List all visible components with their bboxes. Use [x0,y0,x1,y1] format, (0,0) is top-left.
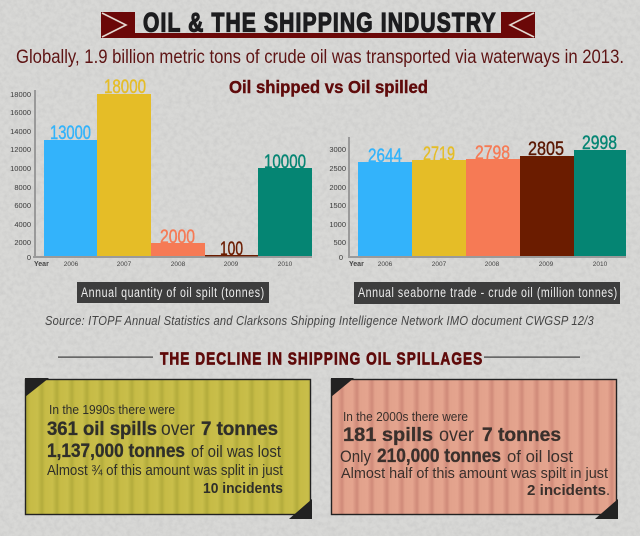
icon: bottom-right corner [595,499,618,519]
x axis labels [34,261,293,268]
bar 2009 [205,239,258,260]
bar 2006: 2644 [368,146,402,167]
text: 1990s facts: In the 1990s there were [49,402,175,417]
y axis: 2000 [329,183,346,192]
text: 2000s facts [340,409,610,499]
y axis: 10000 [10,164,31,173]
y axis: 0 [339,253,343,262]
x axis labels: 2008 [485,261,500,268]
y axis: 2500 [329,164,346,173]
chart caption: seaborne trade [354,282,620,304]
y axis: 2000 [14,238,31,247]
y axis: 4000 [14,220,31,229]
bar 2007: 18000 [104,77,146,98]
bar chart: annual quantity of oil spilt [10,77,312,268]
text: 1990s facts: 10 incidents [203,481,283,497]
bar 2008 [151,227,205,256]
bar 2008 [466,143,520,256]
bar 2010 [258,152,312,256]
y axis: 12000 [10,145,31,154]
y axis: 1000 [329,220,346,229]
y axis: 18000 [10,90,31,99]
text: 2000s facts: In the 2000s there were [343,409,468,424]
text: 2000s facts: 2 incidents [527,483,606,499]
bar 2009: 100 [220,239,243,260]
bar chart: seaborne crude oil trade [329,133,626,268]
y axis: 6000 [14,201,31,210]
x axis labels: 2007 [117,261,132,268]
bar 2008: 2798 [475,143,510,164]
bar 2007 [412,144,466,256]
chart caption: oil spilt: Annual quantity of oil spilt (tonnes) [81,285,264,300]
x axis labels [349,261,608,268]
text: 2000s facts: 181 spills [343,425,433,446]
y axis: 1500 [329,201,346,210]
bar 2010: 2998 [582,133,617,154]
x axis labels: 2007 [432,261,447,268]
text: 1990s facts [47,402,283,497]
text: 2000s facts: over [439,425,475,446]
chart caption: seaborne trade: Annual seaborne trade - crude oil (million tonnes) [358,285,617,300]
text: 2000s facts: 7 tonnes [482,425,561,446]
icon: left ribbon end [101,12,135,38]
y axis: 0 [27,253,31,262]
bar 2006 [44,123,97,256]
bar 2009 [520,139,574,256]
y axis: 500 [333,238,346,247]
x axis labels: 2008 [171,261,186,268]
icon: right ribbon end [501,12,535,38]
text: 2000s facts: Almost half of this amount was spilt in just [341,466,608,482]
source note: Source: ITOPF Annual Statistics and Clarksons Shipping Intelligence Network IMO document CWGSP 12/3 [45,313,594,328]
title: OIL & THE SHIPPING INDUSTRY [143,8,496,38]
x axis labels: Year [34,261,49,268]
title banner [101,8,535,38]
y axis: 8000 [14,183,31,192]
x axis labels: 2010 [278,261,293,268]
bar 2007 [97,77,151,256]
bar 2009: 2805 [528,139,564,160]
x axis labels: 2006 [378,261,393,268]
y axis [10,90,312,262]
text: 2000s facts: . [606,483,610,499]
icon: bottom-right corner [289,499,312,519]
chart heading: Oil shipped vs Oil spilled [229,77,428,97]
bar 2010: 10000 [264,152,306,173]
text: 1990s facts: 7 tonnes [201,419,278,440]
panel: 1990s [25,378,312,519]
y axis: 14000 [10,127,31,136]
text: 1990s facts: 1,137,000 tonnes [47,441,185,462]
text: 1990s facts: over [161,419,196,440]
panel: 2000s [331,378,618,519]
icon: top-left corner [25,378,49,397]
bar 2008: 2000 [160,227,195,248]
y axis: 3000 [329,145,346,154]
y axis [329,137,626,262]
icon: top-left corner [331,378,354,397]
section heading: THE DECLINE IN SHIPPING OIL SPILLAGES [160,350,483,369]
bar 2007: 2719 [423,144,455,165]
x axis labels: 2009 [539,261,554,268]
text: 2000s facts: 210,000 tonnes [377,446,501,467]
x axis labels: 2010 [593,261,608,268]
text: 1990s facts: of oil was lost [191,442,281,461]
x axis labels: 2006 [64,261,79,268]
text: 1990s facts: Almost ¾ of this amount was split in just [47,463,283,479]
x axis labels: Year [349,261,364,268]
bar 2006: 13000 [50,123,91,144]
text: 1990s facts: 361 oil spills [47,419,157,440]
x axis labels: 2009 [224,261,239,268]
bar 2006 [358,146,412,256]
text: 2000s facts: of oil lost [507,447,573,466]
y axis: 16000 [10,108,31,117]
bar 2010 [574,133,626,256]
text: 2000s facts: Only [340,447,371,466]
